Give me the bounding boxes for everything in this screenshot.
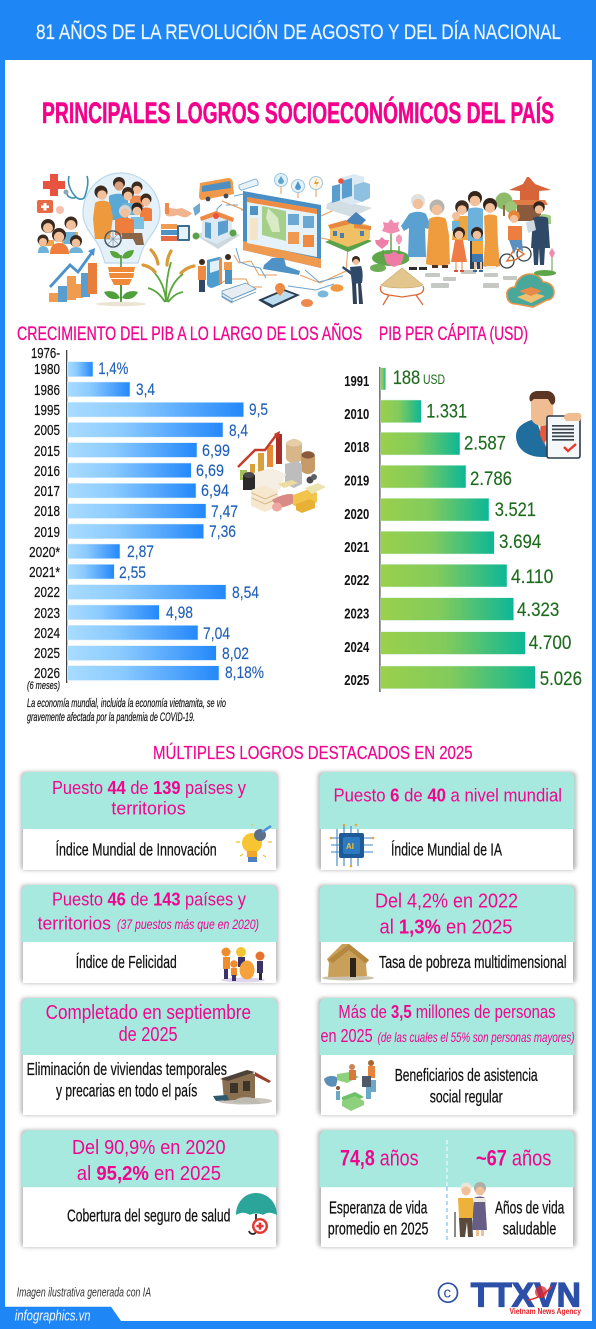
- icon: aid recipients and money: [324, 1060, 376, 1111]
- icon: thatched hut: [322, 944, 374, 980]
- card: temporary housing elimination: [21, 998, 278, 1115]
- section heading: GDP growth: CRECIMIENTO DEL PIB A LO LARGO DE LOS AÑOS: [17, 321, 362, 345]
- card: life expectancy: saludable: [503, 1218, 556, 1238]
- bar chart: GDP per capita: 2018: [344, 439, 369, 456]
- card: temporary housing elimination: Completado en septiembre: [46, 1002, 251, 1024]
- bar chart: GDP growth by year: 7,36: [209, 522, 236, 541]
- bar chart: GDP growth by year: 2019: [34, 525, 60, 541]
- illustration: digital services and monitor: [161, 174, 372, 308]
- bar chart: GDP growth by year: 2005: [34, 423, 60, 439]
- bar chart: GDP per capita: 5.026: [540, 669, 582, 690]
- bar chart: GDP per capita: 1991: [344, 373, 369, 390]
- card: health insurance coverage: [21, 1130, 278, 1247]
- card: happiness index: Puesto 46 de 143 países y: [52, 890, 246, 910]
- illustration: Vietnamese family and heritage: [370, 177, 556, 307]
- card: health insurance coverage: Cobertura del seguro de salud: [67, 1206, 230, 1226]
- card: happiness index: (37 puestos más que en 2020): [117, 916, 259, 932]
- bar chart: GDP per capita: USD: [423, 371, 445, 387]
- card: life expectancy: Años de vida: [495, 1197, 564, 1217]
- footnote: pandemic note: La economía mundial, incluida la economía vietnamita, se vio: [27, 696, 226, 710]
- card: life expectancy: [318, 1130, 576, 1247]
- card: life expectancy: ~67 años: [476, 1146, 551, 1171]
- card: innovation index: territorios: [111, 798, 186, 818]
- bar chart: GDP growth by year: 8,4: [229, 421, 248, 440]
- card: life expectancy: promedio en 2025: [328, 1218, 428, 1238]
- bar chart: GDP per capita: 4.700: [529, 633, 571, 654]
- card: social assistance beneficiaries: social regular: [430, 1087, 503, 1107]
- card: AI index: Índice Mundial de IA: [391, 840, 502, 860]
- bar chart: GDP per capita: 2.587: [464, 434, 506, 455]
- bar chart: GDP per capita: 1.331: [426, 402, 467, 423]
- bar chart: GDP per capita: 2020: [344, 506, 369, 523]
- bar chart: GDP per capita: 2022: [344, 572, 369, 589]
- section heading: GDP per capita: PIB PER CÁPITA (USD): [379, 322, 528, 345]
- bar chart: GDP growth by year: (6 meses): [27, 680, 60, 692]
- bar chart: GDP growth by year: 2015: [34, 444, 60, 460]
- icon: happy people: [221, 947, 265, 982]
- card: life expectancy: 74,8 años: [340, 1146, 419, 1171]
- bar chart: GDP growth by year: 2,55: [119, 563, 146, 582]
- card: multidimensional poverty: [318, 885, 576, 983]
- section heading: achievements 2025: MÚLTIPLES LOGROS DESTACADOS EN 2025: [153, 742, 473, 763]
- bar chart: GDP growth by year: 1976-: [31, 346, 60, 362]
- bar chart: GDP growth by year: 2023: [34, 606, 60, 622]
- bar chart: GDP per capita: 2.786: [470, 469, 512, 490]
- card: social assistance beneficiaries: en 2025: [320, 1026, 373, 1046]
- bar chart: GDP per capita: 2025: [344, 672, 369, 689]
- footnote: pandemic note: gravemente afectada por la pandemia de COVID-19.: [27, 710, 195, 724]
- card: happiness index: Índice de Felicidad: [76, 952, 177, 972]
- bar chart: GDP growth by year: 2020*: [29, 545, 60, 561]
- bar chart: GDP growth by year: 6,94: [201, 481, 229, 500]
- footer tab: infographics.vn: [0, 1307, 596, 1329]
- bar chart: GDP growth by year: 1980: [34, 362, 60, 378]
- card: temporary housing elimination: de 2025: [119, 1024, 178, 1046]
- card: temporary housing elimination: y precarias en todo el país: [56, 1081, 197, 1101]
- bar chart: GDP per capita: 188: [393, 368, 420, 389]
- card: happiness index: territorios: [38, 914, 111, 934]
- bar chart: GDP growth by year: 6,69: [196, 461, 224, 480]
- bar chart: GDP per capita: 4.110: [511, 567, 553, 588]
- bar chart: GDP growth by year: 7,04: [203, 624, 230, 643]
- card: happiness index: [21, 885, 278, 983]
- bar chart: GDP growth by year: 1995: [34, 403, 60, 419]
- card: innovation index: Puesto 44 de 139 países y: [52, 778, 246, 798]
- card: life expectancy: Esperanza de vida: [329, 1197, 428, 1217]
- card: multidimensional poverty: Del 4,2% en 2022: [375, 891, 518, 913]
- bar chart: GDP per capita: 2021: [344, 539, 369, 556]
- bar chart: GDP per capita: 3.694: [499, 532, 542, 553]
- bar chart: GDP growth by year: 2018: [34, 504, 60, 520]
- bar chart: GDP growth by year: 3,4: [136, 380, 155, 399]
- bar chart: GDP growth by year: 2,87: [127, 542, 154, 561]
- footnote: pandemic note: [27, 696, 226, 724]
- bar chart: GDP growth by year: 6,99: [202, 441, 230, 460]
- bar chart: GDP growth by year: 2016: [34, 464, 60, 480]
- illustration: health, family, bulb and growth: [37, 173, 194, 306]
- bar chart: GDP growth by year: 8,02: [222, 644, 249, 663]
- bar chart: GDP per capita: 2019: [344, 473, 369, 490]
- bar chart: GDP growth by year: [27, 346, 268, 692]
- logo: copyright and TTXVN: Vietnam News Agency: [510, 1307, 581, 1316]
- bar chart: GDP per capita: 4.323: [517, 600, 559, 621]
- bar chart: GDP growth by year: 2022: [34, 585, 60, 601]
- bar chart: GDP growth by year: 2017: [34, 484, 60, 500]
- card: social assistance beneficiaries: Beneficiarios de asistencia: [395, 1065, 538, 1085]
- bar chart: GDP growth by year: 2024: [34, 626, 60, 642]
- card: health insurance coverage: Del 90,9% en 2020: [72, 1137, 226, 1159]
- card: AI index: Puesto 6 de 40 a nivel mundial: [334, 786, 562, 806]
- bar chart: GDP growth by year: 2021*: [29, 565, 60, 581]
- card: AI index: [318, 772, 576, 870]
- card: social assistance beneficiaries: Más de 3,5 millones de personas: [338, 1002, 556, 1022]
- bar chart: GDP growth by year: 2025: [34, 646, 60, 662]
- bar chart: GDP growth by year: 1986: [34, 383, 60, 399]
- icon: AI chip: [330, 824, 374, 867]
- bar chart: GDP growth by year: 8,18%: [225, 663, 264, 682]
- credit note: AI-generated image: Imagen ilustrativa generada con IA: [17, 1285, 151, 1300]
- icon: goods and economic growth: [238, 431, 326, 513]
- bar chart: GDP per capita: 3.521: [495, 500, 536, 521]
- bar chart: GDP growth by year: 4,98: [166, 603, 193, 622]
- bar chart: GDP per capita: 2023: [344, 606, 369, 623]
- bar chart: GDP per capita: 2024: [344, 639, 370, 656]
- footer tab: infographics.vn: infographics.vn: [15, 1308, 90, 1325]
- bar chart: GDP growth by year: 2026: [34, 666, 60, 682]
- card: multidimensional poverty: al 1,3% en 2025: [380, 917, 512, 939]
- logo: copyright and TTXVN: c: [444, 1284, 452, 1302]
- card: innovation index: Índice Mundial de Innovación: [56, 840, 217, 860]
- card: social assistance beneficiaries: [318, 998, 576, 1115]
- icon: businessman with clipboard: [516, 391, 581, 458]
- bar chart: GDP growth by year: 8,54: [232, 583, 259, 602]
- card: health insurance coverage: al 95,2% en 2025: [77, 1163, 221, 1185]
- icon: light bulb with gear: [236, 824, 272, 862]
- bar chart: GDP per capita: 2010: [344, 406, 369, 423]
- icon: dilapidated house: [213, 1070, 272, 1104]
- icon: elderly couple: [455, 1182, 487, 1237]
- icon: AI chip: AI: [346, 842, 354, 851]
- bar chart: GDP growth by year: 9,5: [249, 400, 268, 419]
- icon: umbrella with medical cross: [236, 1193, 277, 1234]
- bar chart: GDP growth by year: 7,47: [211, 502, 238, 521]
- card: innovation index: [21, 772, 278, 870]
- card: temporary housing elimination: Eliminación de viviendas temporales: [27, 1059, 227, 1079]
- bar chart: GDP growth by year: 1,4%: [98, 359, 128, 378]
- bar chart: GDP per capita: [344, 367, 582, 692]
- logo: copyright and TTXVN: TTXVN: [471, 1277, 581, 1315]
